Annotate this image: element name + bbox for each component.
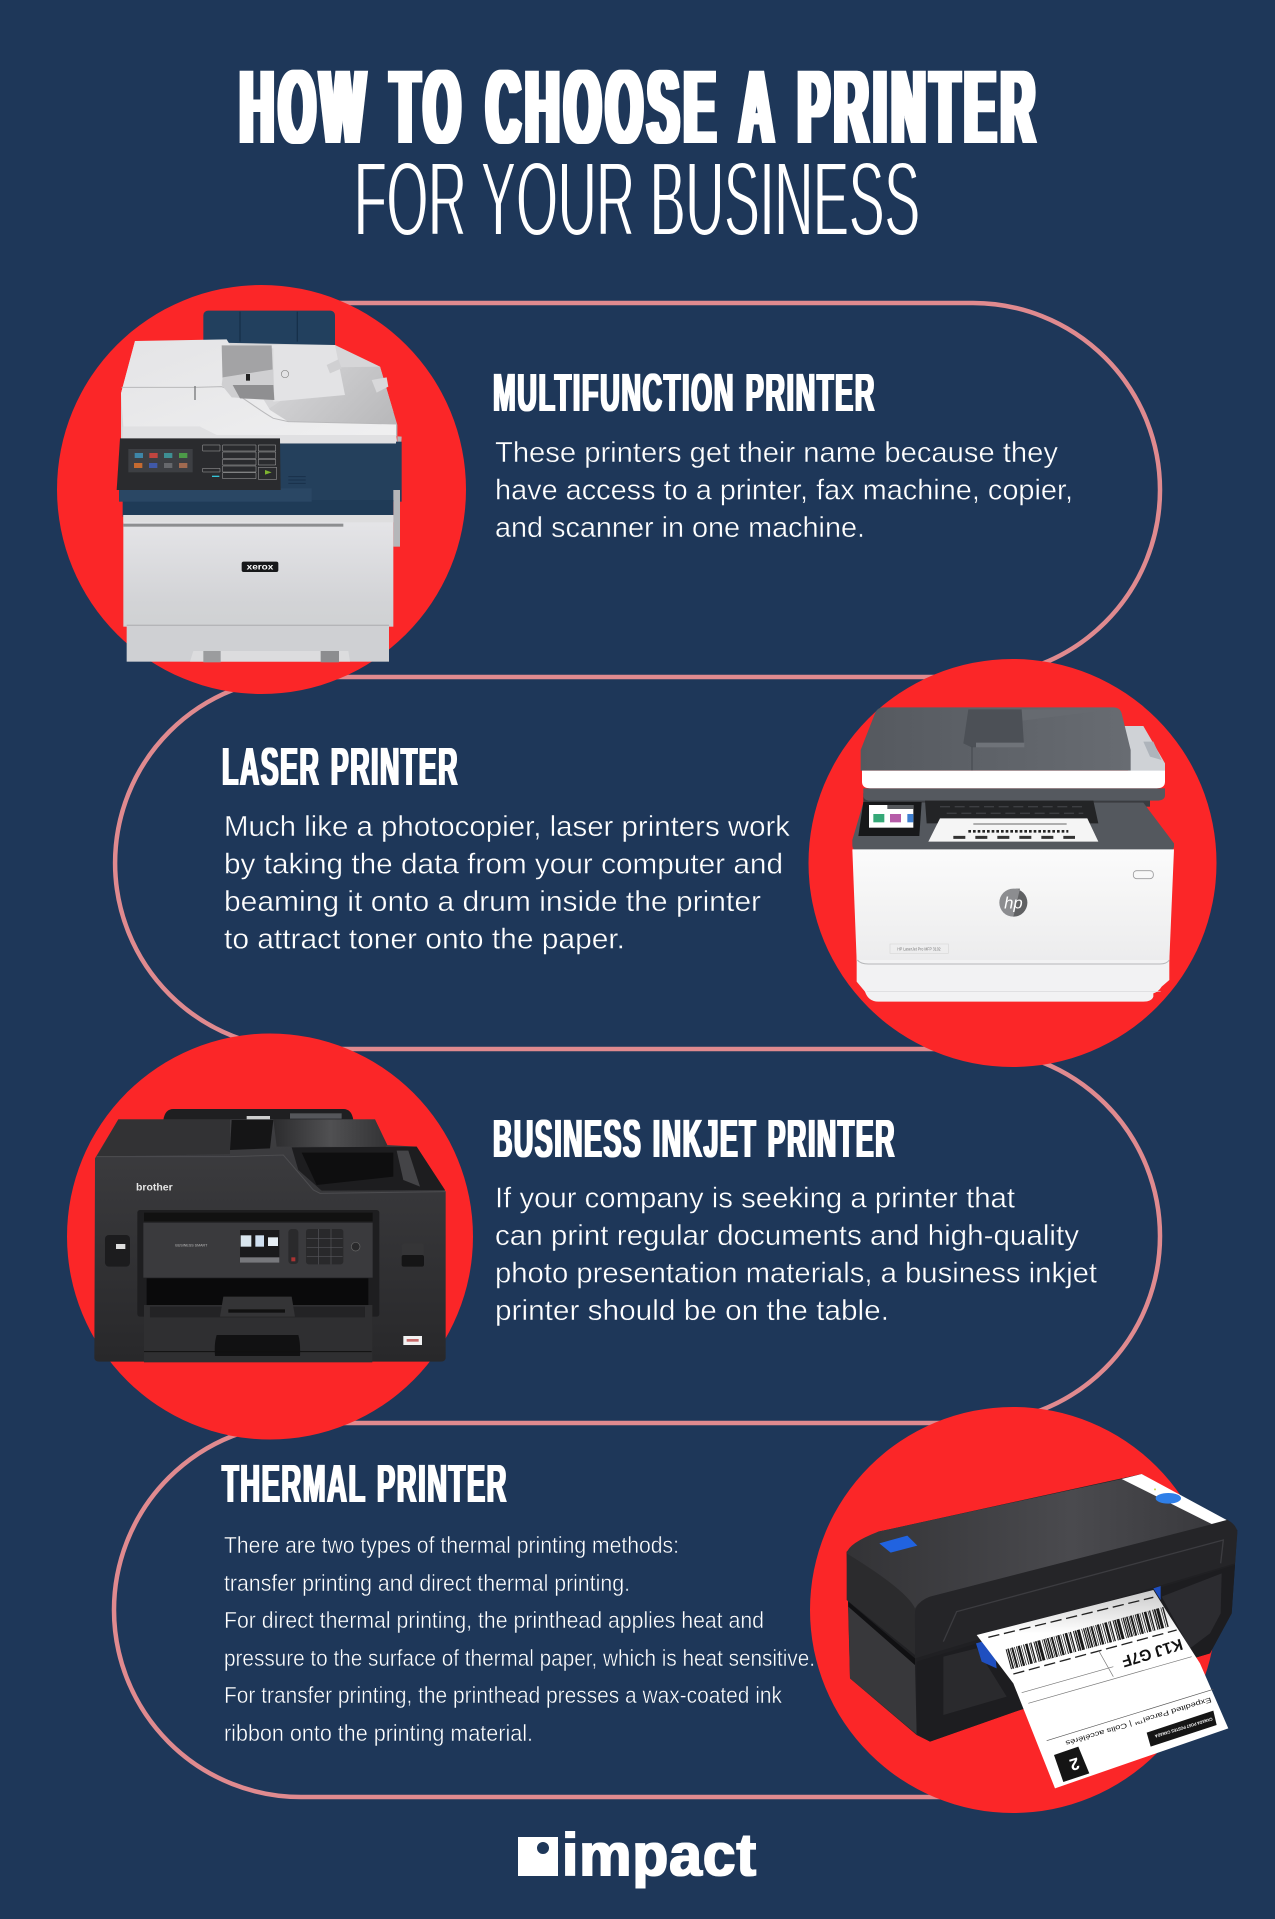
- text block: multifunction printer description: [495, 437, 1073, 544]
- text block: thermal printer description: transfer printing and direct thermal printing.: [224, 1570, 630, 1596]
- icon: HP laser printer: [852, 707, 1174, 1002]
- text block: thermal printer description: There are two types of thermal printing methods:: [224, 1532, 679, 1558]
- panel: business inkjet printer: [67, 1034, 473, 1440]
- heading: thermal printer: THERMAL PRINTER: [222, 1454, 508, 1514]
- logo: impact: [518, 1822, 757, 1888]
- text block: multifunction printer description: These printers get their name because they: [495, 437, 1059, 469]
- text block: laser printer description: to attract toner onto the paper.: [224, 924, 625, 956]
- text block: thermal printer description: pressure to the surface of thermal paper, which is heat sensitive.: [224, 1645, 815, 1671]
- text block: business inkjet description: can print regular documents and high-quality: [495, 1220, 1080, 1252]
- text block: laser printer description: beaming it onto a drum inside the printer: [224, 886, 762, 918]
- panel: multifunction printer: [57, 285, 466, 694]
- panel: laser printer: [808, 659, 1216, 1067]
- text block: thermal printer description: [224, 1532, 815, 1746]
- postal logo block: [1147, 1711, 1217, 1747]
- text block: laser printer description: Much like a photocopier, laser printers work: [224, 811, 791, 843]
- logo square mark: [518, 1837, 558, 1876]
- red circle behind multifunction printer: [57, 285, 466, 694]
- label number block: [1054, 1747, 1089, 1782]
- HP logo: hp: [1004, 893, 1023, 912]
- logo wordmark: impact: [562, 1822, 757, 1888]
- text block: laser printer description: by taking the data from your computer and: [224, 848, 783, 880]
- model label: HP LaserJet Pro MFP 3102: [897, 947, 941, 952]
- text block: thermal printer description: ribbon onto the printing material.: [224, 1720, 533, 1746]
- text block: thermal printer description: For direct thermal printing, the printhead applies heat and: [224, 1607, 764, 1633]
- text block: multifunction printer description: have access to a printer, fax machine, copier,: [495, 474, 1073, 506]
- Xerox badge: xerox: [247, 562, 274, 572]
- Brother logo: brother: [136, 1183, 173, 1194]
- text block: business inkjet description: printer should be on the table.: [495, 1295, 889, 1327]
- icon: Brother inkjet printer: BUSINESS SMART: [175, 1244, 208, 1248]
- text block: business inkjet description: photo presentation materials, a business inkjet: [495, 1258, 1097, 1290]
- Xerox badge: [242, 562, 278, 572]
- label number block: 2: [1067, 1754, 1082, 1774]
- text: LASER PRINTER: [222, 737, 459, 797]
- red circle behind laser printer: [808, 659, 1216, 1067]
- icon: Brother inkjet printer: [94, 1109, 446, 1362]
- icon: Xerox multifunction printer: [117, 311, 402, 662]
- model label: [890, 944, 948, 953]
- text block: laser printer description: [224, 811, 791, 956]
- title: [240, 49, 1040, 258]
- panel: thermal printer: [810, 1407, 1237, 1813]
- postal logo block: CANADA POST POSTES CANADA: [1154, 1716, 1213, 1739]
- text block: business inkjet description: If your company is seeking a printer that: [495, 1182, 1015, 1214]
- text block: thermal printer description: For transfer printing, the printhead presses a wax-coated ink: [224, 1682, 782, 1708]
- heading: multifunction printer: MULTIFUNCTION PRINTER: [493, 363, 876, 423]
- label code text: K1J G7F: [1119, 1635, 1184, 1669]
- serpentine pill outline connecting the four sections: [114, 303, 1160, 1797]
- red circle behind inkjet printer: [67, 1034, 473, 1440]
- label service text: Expedited Parcel™ | Colis accélérés: [1064, 1695, 1212, 1746]
- icon: thermal label printer: [847, 1474, 1237, 1788]
- text block: business inkjet description: [495, 1182, 1097, 1327]
- barcode: [1008, 1617, 1167, 1659]
- HP logo: [999, 889, 1027, 917]
- text block: multifunction printer description: and scanner in one machine.: [495, 512, 865, 544]
- red circle behind thermal printer: [810, 1407, 1216, 1813]
